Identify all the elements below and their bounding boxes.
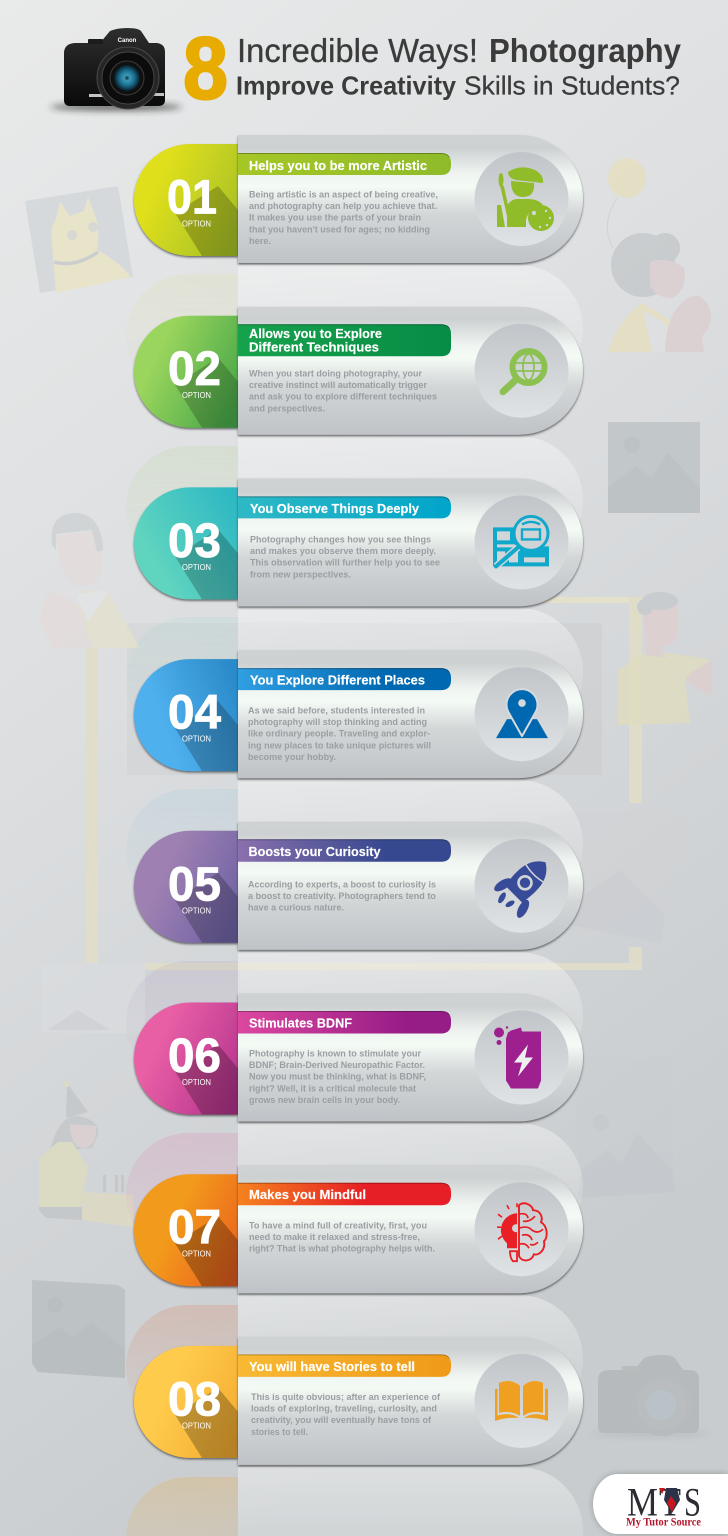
title line 2: Improve Creativity bbox=[236, 70, 457, 100]
big number 8: 8 bbox=[183, 18, 228, 118]
body text 02 bbox=[249, 368, 437, 414]
option pill 03: 03 bbox=[168, 515, 221, 568]
body text 07: need to make it relaxed and stress-free, bbox=[249, 1232, 420, 1243]
option pill 05 bbox=[134, 831, 238, 943]
heading bar 01: Helps you to be more Artistic bbox=[249, 159, 427, 173]
option pill 08 bbox=[134, 1346, 238, 1458]
content panel 03 bbox=[238, 478, 583, 606]
heading bar 01 bbox=[238, 153, 451, 175]
content panel 05 bbox=[238, 822, 583, 950]
heading bar 08 bbox=[238, 1354, 451, 1377]
logo letters MTS: M bbox=[627, 1480, 658, 1524]
body text 01: here. bbox=[249, 236, 271, 247]
heading bar 03: You Observe Things Deeply bbox=[250, 502, 419, 516]
icon: map pin bbox=[474, 667, 568, 761]
option pill 06: OPTION bbox=[182, 1077, 211, 1087]
body text 06: Photography is known to stimulate your bbox=[249, 1048, 421, 1060]
content panel 08 bbox=[238, 1337, 583, 1465]
body text 05: have a curious nature. bbox=[248, 903, 344, 914]
option pill 05: OPTION bbox=[182, 905, 211, 915]
heading bar 04: You Explore Different Places bbox=[250, 674, 425, 688]
body text 01: that you haven't used for ages; no kidding bbox=[249, 224, 430, 235]
body text 08: loads of exploring, traveling, curiosity, and bbox=[251, 1404, 437, 1415]
illustration: man praying bbox=[40, 513, 140, 648]
body text 03: from new perspectives. bbox=[250, 569, 351, 580]
body text 04: like ordinary people. Traveling and explor- bbox=[248, 729, 430, 740]
icon: rocket bbox=[474, 839, 568, 933]
title line 1: Photography bbox=[489, 32, 682, 69]
body text 02: and ask you to explore different techniques bbox=[249, 392, 437, 403]
illustration: man in yellow shirt bbox=[618, 592, 712, 725]
body text 03: This observation will further help you to see bbox=[250, 558, 440, 569]
header camera bbox=[50, 28, 182, 110]
illustration: girl with birthday cake bbox=[39, 1081, 133, 1227]
card 07: mindful bbox=[134, 1165, 583, 1293]
heading bar 02: Different Techniques bbox=[249, 340, 379, 354]
content panel 07 bbox=[238, 1165, 583, 1293]
heading bar 03 bbox=[238, 496, 451, 518]
heading bar 02 bbox=[238, 324, 451, 356]
reflections of the option pills bbox=[126, 265, 583, 1536]
title line 2 bbox=[236, 70, 680, 100]
body text 07: To have a mind full of creativity, first, you bbox=[249, 1220, 427, 1231]
body text 03 bbox=[250, 534, 440, 580]
body text 02: and perspectives. bbox=[249, 403, 325, 414]
faded photo frame backdrop bbox=[42, 597, 687, 1198]
card 03: observe bbox=[134, 478, 583, 606]
body text 08: This is quite obvious; after an experience of bbox=[251, 1392, 441, 1403]
option pill 03 bbox=[134, 487, 238, 599]
option pill 01: 01 bbox=[167, 172, 217, 224]
body text 01: Being artistic is an aspect of being creative, bbox=[249, 190, 438, 200]
illustration: woman with balloon bbox=[607, 158, 711, 352]
body text 06: grows new brain cells in your body. bbox=[249, 1095, 400, 1106]
heading bar 07 bbox=[238, 1183, 451, 1205]
body text 07: right? That is what photography helps with. bbox=[249, 1244, 435, 1255]
illustration: lower left placeholder bbox=[32, 1280, 125, 1378]
heading bar 07: Makes you Mindful bbox=[249, 1188, 366, 1202]
body text 07 bbox=[249, 1220, 435, 1255]
card 06: BDNF bbox=[134, 994, 583, 1122]
body text 06: right? Well, it is a critical molecule that bbox=[249, 1083, 417, 1094]
content panel 02 bbox=[238, 307, 583, 435]
option pill 02: 02 bbox=[168, 343, 221, 396]
content panel 04 bbox=[238, 650, 583, 778]
icon: brain and light bulb bbox=[474, 1182, 568, 1276]
logo letters MTS: T bbox=[659, 1480, 681, 1524]
icon: painter bbox=[474, 152, 568, 246]
logo letters MTS: S bbox=[684, 1480, 701, 1524]
illustration: cat poster bbox=[25, 186, 133, 293]
title line 2: Skills in Students? bbox=[464, 70, 680, 100]
body text 06 bbox=[249, 1048, 426, 1106]
body text 01: and photography can help you achieve that. bbox=[249, 201, 437, 212]
logo wordmark: My Tutor Source bbox=[626, 1516, 701, 1528]
heading bar 02: Allows you to Explore bbox=[249, 327, 382, 341]
option pill 02 bbox=[134, 316, 238, 428]
faded camera illustration bbox=[590, 1355, 710, 1437]
logo badge: My Tutor Source bbox=[593, 1474, 728, 1534]
body text 05: a boost to creativity. Photographers tend to bbox=[248, 891, 436, 902]
option pill 01: OPTION bbox=[182, 218, 211, 228]
heading bar 06: Stimulates BDNF bbox=[249, 1016, 352, 1030]
body text 05 bbox=[248, 880, 436, 914]
option pill 07: OPTION bbox=[182, 1249, 211, 1259]
logo letters MTS bbox=[627, 1480, 701, 1524]
heading bar 05 bbox=[238, 839, 451, 862]
content panel 01 bbox=[238, 135, 583, 263]
option pill 01 bbox=[134, 144, 238, 256]
option pill 07: 07 bbox=[168, 1202, 221, 1255]
body text 05: According to experts, a boost to curiosity is bbox=[248, 879, 436, 890]
body text 04: become your hobby. bbox=[248, 752, 336, 763]
body text 01: It makes you use the parts of your brain bbox=[249, 213, 421, 224]
title line 1: Incredible Ways! bbox=[237, 32, 478, 69]
body text 04: photography will stop thinking and acting bbox=[248, 717, 427, 728]
content panel 06 bbox=[238, 994, 583, 1122]
heading bar 05: Boosts your Curiosity bbox=[248, 845, 381, 859]
body text 08: stories to tell. bbox=[251, 1427, 308, 1438]
title line 1 bbox=[237, 32, 682, 69]
card 02: techniques bbox=[134, 307, 583, 435]
option pill 07 bbox=[134, 1174, 238, 1286]
heading bar 04 bbox=[238, 668, 451, 690]
icon: open book bbox=[474, 1354, 568, 1448]
card 05: curiosity bbox=[134, 822, 583, 950]
card 08: stories bbox=[134, 1337, 583, 1465]
option pill 03: OPTION bbox=[182, 562, 211, 572]
body text 01 bbox=[249, 190, 438, 247]
body text 08: creativity, you will eventually have tons of bbox=[251, 1415, 432, 1426]
body text 08 bbox=[251, 1392, 441, 1438]
body text 04: ing new places to take unique pictures will bbox=[248, 740, 431, 751]
body text 06: BDNF; Brain-Derived Neuropathic Factor. bbox=[249, 1060, 425, 1071]
icon: magnifier with globe bbox=[474, 324, 568, 418]
option pill 08: OPTION bbox=[182, 1420, 211, 1430]
option pill 08: 08 bbox=[168, 1373, 221, 1426]
option pill 02: OPTION bbox=[182, 390, 211, 400]
option pill 04: 04 bbox=[168, 687, 221, 740]
option pill 06 bbox=[134, 1002, 238, 1114]
option pill 05: 05 bbox=[168, 858, 221, 911]
icon: energy drink can bbox=[474, 1010, 568, 1104]
body text 06: Now you must be thinking, what is BDNF, bbox=[249, 1072, 426, 1083]
camera brand: Canon bbox=[118, 38, 137, 44]
body text 03: Photography changes how you see things bbox=[250, 534, 431, 546]
body text 03: and makes you observe them more deeply. bbox=[250, 546, 436, 557]
option pill 04 bbox=[134, 659, 238, 771]
card 04: places bbox=[134, 650, 583, 778]
body text 02: When you start doing photography, your bbox=[249, 368, 422, 380]
option pill 04: OPTION bbox=[182, 734, 211, 744]
body text 04 bbox=[248, 706, 431, 763]
body text 02: creative instinct will automatically trigger bbox=[249, 380, 427, 391]
icon: map and magnifying lens bbox=[474, 495, 568, 589]
title bbox=[183, 18, 682, 118]
heading bar 06 bbox=[238, 1011, 451, 1034]
heading bar 08: You will have Stories to tell bbox=[249, 1360, 415, 1374]
illustration: image placeholder bbox=[608, 422, 700, 513]
card 01: artistic bbox=[134, 135, 583, 263]
option pill 06: 06 bbox=[168, 1030, 221, 1083]
body text 04: As we said before, students interested in bbox=[248, 705, 425, 716]
